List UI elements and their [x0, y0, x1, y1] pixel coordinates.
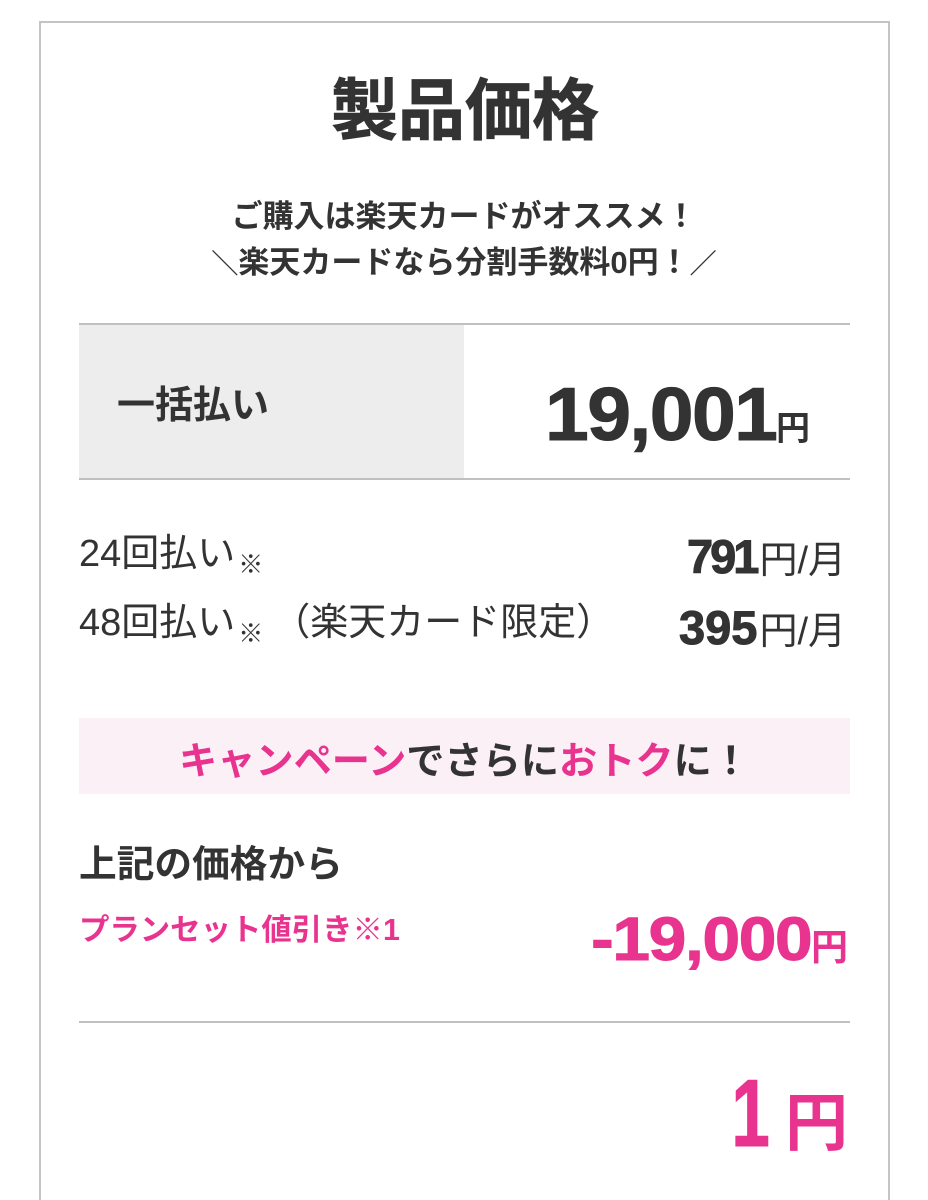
24-installment label: 24回払い※: [79, 533, 263, 579]
subtitle text: ＼楽天カードなら分割手数料0円！／: [211, 245, 717, 280]
48-installment price: 395: [679, 601, 757, 654]
discount intro: 上記の価格から: [79, 843, 343, 885]
campaign banner: [79, 718, 850, 794]
divider: [79, 1021, 850, 1023]
24-installment price: 791: [687, 530, 756, 583]
lump-sum top rule: [79, 323, 850, 325]
final price: 円: [785, 1089, 848, 1159]
lump-sum bottom rule: [79, 478, 850, 480]
panel: lump-sum price: [79, 323, 850, 480]
campaign banner: キャンペーンでさらにおトクに！: [179, 740, 750, 783]
final price: 1: [731, 1060, 768, 1167]
24-installment price: [687, 530, 846, 583]
subtitle text: [211, 199, 717, 280]
24-installment price: 円/月: [759, 540, 846, 582]
discount amount: -19,000: [591, 905, 811, 973]
lump-sum label: 一括払い: [117, 385, 269, 427]
48-installment label: 48回払い※（楽天カード限定）: [79, 602, 614, 648]
48-installment price: 円/月: [759, 611, 846, 653]
lump-sum price: 円: [776, 410, 810, 448]
48-installment price: [679, 601, 846, 654]
lump-sum label cell: [79, 325, 464, 478]
subtitle text: ご購入は楽天カードがオススメ！: [232, 199, 696, 234]
title: 製品価格: [331, 74, 599, 149]
lump-sum price: 19,001: [545, 372, 776, 456]
discount label: プランセット値引き※1: [79, 913, 400, 947]
final price: [731, 1060, 848, 1167]
discount amount: 円: [811, 927, 848, 968]
